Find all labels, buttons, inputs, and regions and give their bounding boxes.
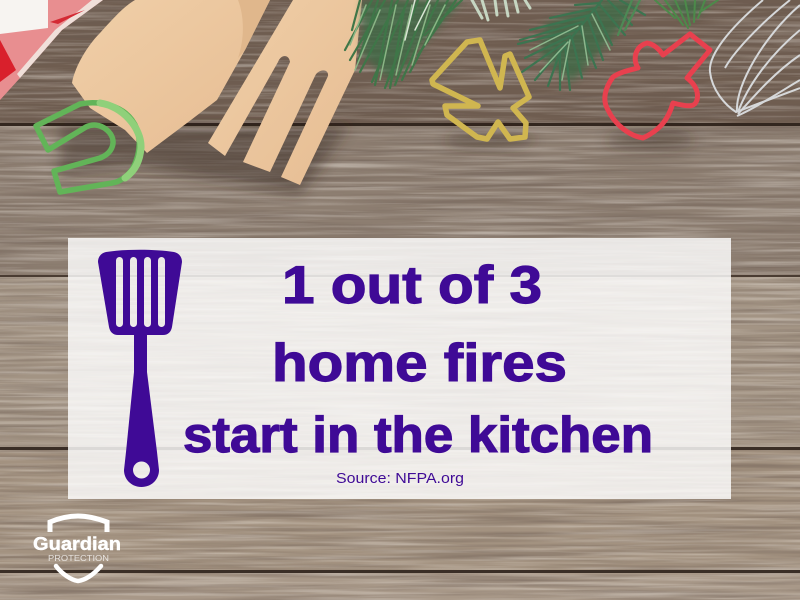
shield top <box>50 516 107 532</box>
snowy sprig <box>472 0 530 20</box>
line 3: start in the kitchen <box>183 407 653 463</box>
wooden fork <box>208 0 362 185</box>
logo wordmark: Guardian <box>33 534 121 554</box>
headline <box>183 256 653 463</box>
logo: Guardian Protection <box>33 516 121 581</box>
pine foliage mass <box>362 0 712 82</box>
translucent text panel <box>68 238 731 499</box>
wire whisk <box>710 0 800 116</box>
branch right <box>655 0 718 28</box>
icon: spatula <box>98 250 182 487</box>
object shadows <box>60 125 695 195</box>
red cookie cutter <box>605 34 710 138</box>
checkered cloth <box>0 0 103 100</box>
branch left <box>345 0 462 88</box>
shield bottom <box>56 566 101 581</box>
logo subtitle: PROTECTION <box>48 553 109 563</box>
green cookie cutter <box>36 103 141 192</box>
branch center <box>518 0 645 90</box>
pine branches <box>345 0 718 90</box>
source note: Source: NFPA.org <box>336 470 464 487</box>
line 2: home fires <box>272 334 567 393</box>
line 1: 1 out of 3 <box>282 256 542 315</box>
wooden spoon <box>72 0 270 153</box>
yellow cookie cutter <box>432 40 529 139</box>
